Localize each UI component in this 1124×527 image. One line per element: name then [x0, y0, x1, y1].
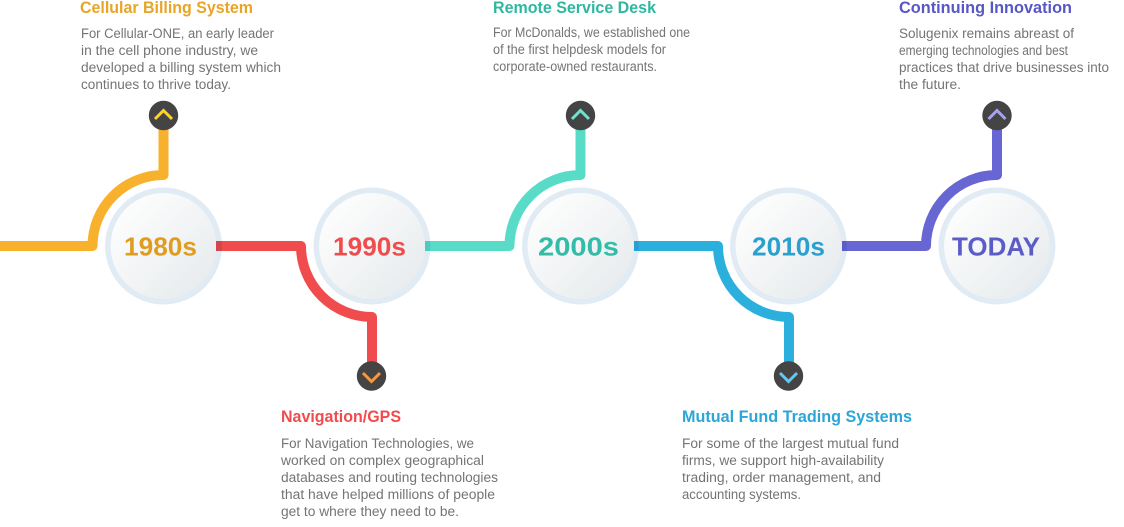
- text block: Navigation/GPS: [280, 436, 498, 519]
- icon: up chevron: [566, 101, 595, 130]
- text block: Navigation/GPS: databases and routing technologies: [281, 470, 498, 485]
- year circle: Today: [941, 190, 1053, 302]
- text block: Cellular Billing System: in the cell phone industry, we: [81, 43, 258, 58]
- year label: 2000s: 2000s: [538, 232, 619, 262]
- text block: Mutual Fund Trading Systems: [682, 436, 899, 502]
- text block: Continuing Innovation: practices that drive businesses into: [899, 60, 1109, 75]
- icon: down chevron: [357, 361, 386, 391]
- icon: up chevron: [982, 101, 1012, 130]
- connector: red: [216, 246, 372, 376]
- text block: Navigation/GPS: For Navigation Technologies, we: [281, 436, 474, 451]
- text block: Continuing Innovation: the future.: [899, 77, 961, 92]
- connector: teal: [425, 115, 580, 246]
- text block: Cellular Billing System: For Cellular-ONE, an early leader: [81, 26, 274, 41]
- connector: purple: [842, 115, 997, 246]
- year circle: 1980s: [108, 190, 219, 302]
- year circle: 1990s: [316, 190, 428, 302]
- text block: Cellular Billing System: [81, 26, 281, 92]
- text block: Navigation/GPS: worked on complex geographical: [280, 453, 484, 468]
- text block: Remote Service Desk: of the first helpdesk models for: [493, 42, 666, 57]
- text block: Navigation/GPS: get to where they need to be.: [281, 504, 459, 519]
- year label: Today: TODAY: [952, 232, 1040, 262]
- icon: up chevron: [149, 101, 178, 130]
- text block: Remote Service Desk: [493, 25, 690, 74]
- connector: blue: [634, 246, 789, 376]
- text block: Navigation/GPS: that have helped millions of people: [281, 487, 495, 502]
- text block: Cellular Billing System: developed a billing system which: [81, 60, 281, 75]
- connector: orange: [0, 115, 164, 246]
- text block: Continuing Innovation: Solugenix remains abreast of: [899, 26, 1074, 41]
- heading: Navigation/GPS: Navigation/GPS: [281, 408, 401, 426]
- year label: 1980s: 1980s: [124, 232, 197, 262]
- text block: Continuing Innovation: emerging technologies and best: [899, 43, 1068, 58]
- year circle: 2000s: [525, 190, 636, 302]
- year circle: 2010s: [733, 190, 844, 302]
- milestone: 2000s: [425, 0, 690, 302]
- text block: Mutual Fund Trading Systems: For some of the largest mutual fund: [682, 436, 899, 451]
- text block: Mutual Fund Trading Systems: trading, order management, and: [682, 470, 881, 485]
- text block: Mutual Fund Trading Systems: firms, we support high-availability: [682, 453, 884, 468]
- year label: 1990s: 1990s: [333, 232, 406, 262]
- text block: Mutual Fund Trading Systems: accounting systems.: [682, 487, 801, 502]
- text block: Remote Service Desk: For McDonalds, we established one: [493, 25, 690, 40]
- text block: Continuing Innovation: [899, 26, 1109, 92]
- text block: Cellular Billing System: continues to thrive today.: [81, 77, 231, 92]
- icon: down chevron: [774, 361, 803, 391]
- milestone: 2010s: [634, 190, 912, 502]
- milestone: 1980s: [0, 0, 281, 302]
- year label: 2010s: 2010s: [752, 232, 825, 262]
- text block: Remote Service Desk: corporate-owned restaurants.: [493, 59, 657, 74]
- milestone: Today: [842, 0, 1109, 302]
- milestone: 1990s: [216, 190, 498, 519]
- heading: Mutual Fund Trading Systems: Mutual Fund Trading Systems: [682, 408, 912, 426]
